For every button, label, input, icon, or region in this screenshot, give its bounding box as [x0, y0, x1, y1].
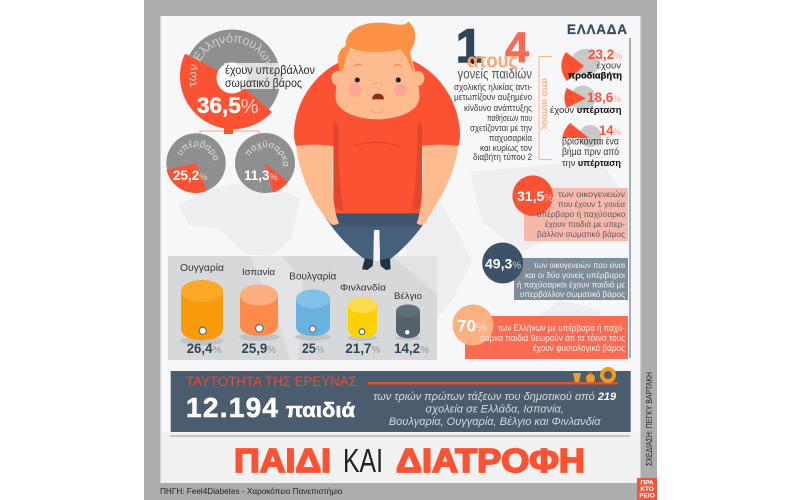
- bar: Spain: Ισπανία: [242, 267, 275, 278]
- donut text: έχουν υπερβάλλον σωματικό βάρος: έχουν υπερβάλλον: [225, 65, 315, 77]
- survey total: 12.194: [186, 392, 278, 423]
- text: parents of children: σχολικής ηλικίας αντι-: [454, 82, 532, 92]
- callout: 49,3%: και οι δύο γονείς υπέρβαροι: [525, 270, 625, 280]
- chart: main donut 36.5%: [180, 30, 315, 130]
- callout: 31,5%: που έχουν 1 γονέα: [558, 199, 625, 209]
- callout: 49,3%: υπερβάλλον σωματικό βάρος: [520, 289, 625, 299]
- callout: 31,5%: των οικογενειών: [558, 189, 625, 199]
- heading: Greece: ΕΛΛΑΔΑ: [567, 22, 627, 37]
- text: parents of children: και κυρίως τον: [480, 143, 533, 153]
- bar: Bulgaria: 25%: [302, 341, 324, 356]
- illustration: overweight boy: [294, 22, 460, 270]
- panel: countries bar chart: [168, 256, 437, 360]
- logo: ΠΡΑ: [640, 480, 654, 486]
- source: ΠΗΓΗ: Feel4Diabetes - Χαροκόπειο Πανεπιστήμιο: [160, 487, 343, 496]
- callout: 70%: των Ελλήνων με υπέρβαρα ή παχύ-: [498, 323, 625, 333]
- stat: one step from hypertension 14%: την υπέρταση: [562, 158, 621, 169]
- bar: Spain: [239, 267, 279, 356]
- connector: [200, 128, 259, 135]
- chart: overweight pie 25,2%: 25,2%: [173, 168, 207, 183]
- bar: Hungary: [180, 262, 224, 356]
- callout: 31,5%: [512, 175, 628, 241]
- donut value: 36,5%: 36,5%: [197, 93, 259, 118]
- stat: one step from hypertension 14%: [562, 122, 621, 169]
- survey description: των τριών πρώτων τάξεων του δημοτικού από 219: [373, 391, 617, 403]
- bar: Finland: [340, 283, 387, 356]
- text: parents of children: σχετίζονται με την: [470, 123, 533, 133]
- stat: hypertension 18,6%: [550, 86, 622, 116]
- callout: 31,5%: 31,5%: [517, 188, 553, 204]
- text: parents of children: διαβήτη τύπου 2: [473, 152, 532, 162]
- chart: obese pie 11,3%: παχύσαρκα: [245, 140, 288, 166]
- chart: obese pie 11,3%: [235, 133, 295, 193]
- title: ΔΙΑΤΡΟΦΗ: [396, 442, 585, 479]
- logo: ΡΕΙΟ: [639, 492, 655, 500]
- text: parents of children: παχυσαρκία: [489, 133, 532, 143]
- bar: Bulgaria: [289, 270, 337, 356]
- design credit: ΣΧΕΔΙΑΣΗ: ΠΕΓΚΥ ΒΑΡΤΑΚΗ: [645, 372, 654, 466]
- stat: hypertension 18,6%: έχουν υπέρταση: [550, 105, 622, 116]
- callout: 49,3%: [482, 242, 628, 300]
- callout: 70%: [452, 304, 628, 359]
- heading: 1 to 4: 1: [456, 19, 482, 72]
- chart: obese pie 11,3%: 11,3%: [244, 168, 278, 183]
- stat: one step from hypertension 14%: βήμα πριν από: [562, 146, 619, 158]
- bar: Finland: Φινλανδία: [340, 283, 387, 294]
- callout: 49,3%: 49,3%: [485, 256, 521, 272]
- survey description: σχολεία σε Ελλάδα, Ισπανία,: [426, 404, 564, 416]
- panel: survey identity: [171, 369, 631, 432]
- stat: prediabetes 23,2%: προδιαβήτη: [568, 70, 622, 82]
- panel: survey identity: παιδιά: [286, 400, 356, 422]
- chart: overweight pie 25,2%: [166, 133, 226, 194]
- heading: 1 to 4: ατους: [467, 50, 518, 72]
- stat: prediabetes 23,2%: 23,2%: [588, 46, 622, 62]
- chart: overweight pie 25,2%: υπέρβαρα: [178, 140, 218, 161]
- stat: one step from hypertension 14%: 14%: [599, 122, 621, 138]
- icons: snacks: [573, 369, 614, 382]
- text: parents of children: παθήσεων που: [487, 113, 532, 123]
- callout: 70%: έχουν φυσιολογικό βάρος: [533, 343, 625, 353]
- heading: 1 to 4: [456, 19, 529, 72]
- callout: 70%: σαρκα παιδιά θεωρούν ότι τα τέκνα τους: [480, 333, 625, 343]
- text: parents of children: [454, 66, 533, 162]
- logo: [637, 478, 657, 500]
- survey heading: ΤΑΥΤΟΤΗΤΑ ΤΗΣ ΕΡΕΥΝΑΣ: [186, 373, 357, 389]
- donut label: των Ελληνόπουλων: των Ελληνόπουλων: [190, 32, 272, 87]
- callout: 49,3%: των οικογενειών που είναι: [534, 260, 625, 270]
- bar: Belgium: 14,2%: [394, 341, 429, 356]
- callout: 70%: 70%: [457, 316, 488, 336]
- bar: Hungary: Ουγγαρία: [180, 262, 224, 274]
- title: ΚΑΙ: [343, 442, 383, 479]
- callout: 31,5%: έχουν παιδιά με υπερ-: [545, 219, 625, 229]
- heading: 1 to 4: 4: [505, 24, 529, 72]
- bar: Belgium: [394, 291, 429, 356]
- bar: Spain: 25,9%: [242, 341, 276, 356]
- title: [234, 442, 585, 479]
- title: ΠΑΙΔΙ: [234, 442, 331, 479]
- bar: Bulgaria: Βουλγαρία: [289, 270, 337, 282]
- bar: Finland: 21,7%: [345, 341, 380, 356]
- callout: 31,5%: βάλλον σωματικό βάρος: [537, 229, 625, 239]
- text: parents of children: κίνδυνο ανάπτυξης: [464, 103, 532, 113]
- bracket: of whom: [539, 56, 552, 160]
- logo: ΚΤΟ: [640, 486, 654, 493]
- bar: Hungary: 26,4%: [187, 341, 221, 356]
- bar: Belgium: Βέλγιο: [394, 291, 422, 302]
- text: parents of children: μετωπίζουν αυξημένο: [454, 92, 532, 102]
- donut text: έχουν υπερβάλλον σωματικό βάρος: σωματικό βάρος: [225, 78, 302, 90]
- survey description: [373, 391, 617, 428]
- text: parents of children: γονείς παιδιών: [458, 66, 532, 82]
- stat: prediabetes 23,2%: έχουν: [597, 60, 621, 72]
- callout: 49,3%: ή παχύσαρκοι έχουν παιδιά με: [517, 280, 625, 290]
- survey description: Βουλγαρία, Ουγγαρία, Βέλγιο και Φινλανδία: [389, 416, 601, 428]
- stat: prediabetes 23,2%: [561, 46, 622, 82]
- stat: one step from hypertension 14%: βρίσκονται ένα: [562, 136, 619, 148]
- callout: 31,5%: υπέρβαρο ή παχύσαρκο: [537, 209, 626, 219]
- stat: hypertension 18,6%: 18,6%: [587, 89, 621, 105]
- bracket: of whom: από αυτούς: [539, 78, 550, 130]
